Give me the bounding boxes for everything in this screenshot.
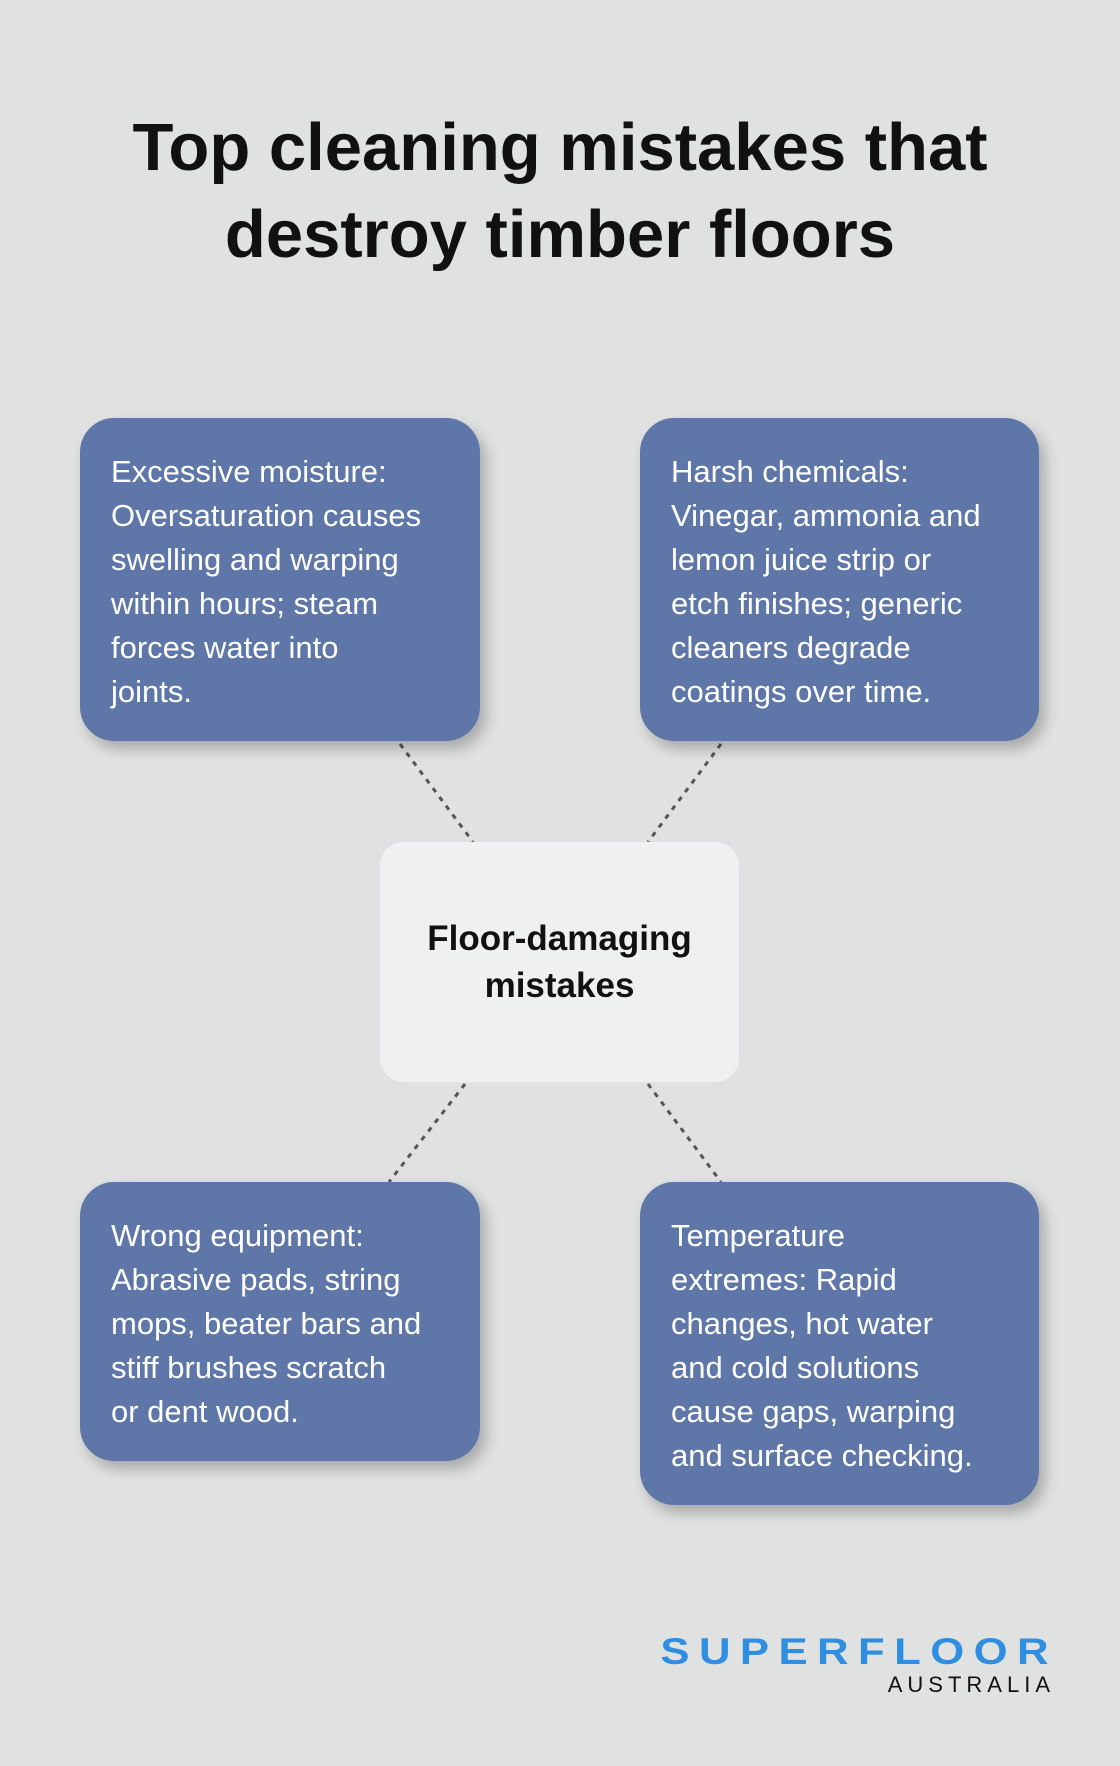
title: Top cleaning mistakes that: [132, 110, 988, 185]
panel: harsh chemicals: cleaners degrade: [671, 630, 911, 665]
panel: wrong equipment: mops, beater bars and: [111, 1306, 421, 1341]
panel: temperature extremes: cause gaps, warping: [671, 1394, 955, 1429]
center node: Floor-damaging: [427, 919, 692, 958]
panel: temperature extremes: [640, 1182, 1039, 1505]
logo: [660, 1631, 1058, 1697]
panel: harsh chemicals: Vinegar, ammonia and: [671, 498, 981, 533]
panel: wrong equipment: or dent wood.: [111, 1394, 299, 1429]
panel: harsh chemicals: etch finishes; generic: [671, 586, 962, 621]
title: [132, 110, 988, 272]
panel: temperature extremes: and surface checking.: [671, 1438, 973, 1473]
panel: excessive moisture: forces water into: [111, 630, 338, 665]
panel: wrong equipment: Wrong equipment:: [111, 1218, 364, 1253]
panel: excessive moisture: joints.: [111, 674, 192, 709]
panel: excessive moisture: Oversaturation causes: [111, 498, 421, 533]
panel: harsh chemicals: lemon juice strip or: [671, 542, 931, 577]
center node: [380, 842, 739, 1082]
panel: excessive moisture: swelling and warping: [111, 542, 399, 577]
panel: harsh chemicals: [640, 418, 1039, 741]
logo: AUSTRALIA: [888, 1672, 1055, 1697]
panel: temperature extremes: and cold solutions: [671, 1350, 919, 1385]
panel: wrong equipment: [80, 1182, 480, 1461]
panel: wrong equipment: Abrasive pads, string: [111, 1262, 400, 1297]
panel: excessive moisture: within hours; steam: [111, 586, 378, 621]
center node: mistakes: [485, 966, 634, 1005]
panel: wrong equipment: stiff brushes scratch: [111, 1350, 386, 1385]
panel: harsh chemicals: coatings over time.: [671, 674, 931, 709]
panel: temperature extremes: Temperature: [671, 1218, 845, 1253]
panel: excessive moisture: Excessive moisture:: [111, 454, 387, 489]
panel: harsh chemicals: Harsh chemicals:: [671, 454, 909, 489]
panel: temperature extremes: extremes: Rapid: [671, 1262, 897, 1297]
title: destroy timber floors: [225, 197, 895, 272]
panel: temperature extremes: changes, hot water: [671, 1306, 933, 1341]
panel: excessive moisture: [80, 418, 480, 741]
logo: SUPERFLOOR: [660, 1631, 1058, 1672]
